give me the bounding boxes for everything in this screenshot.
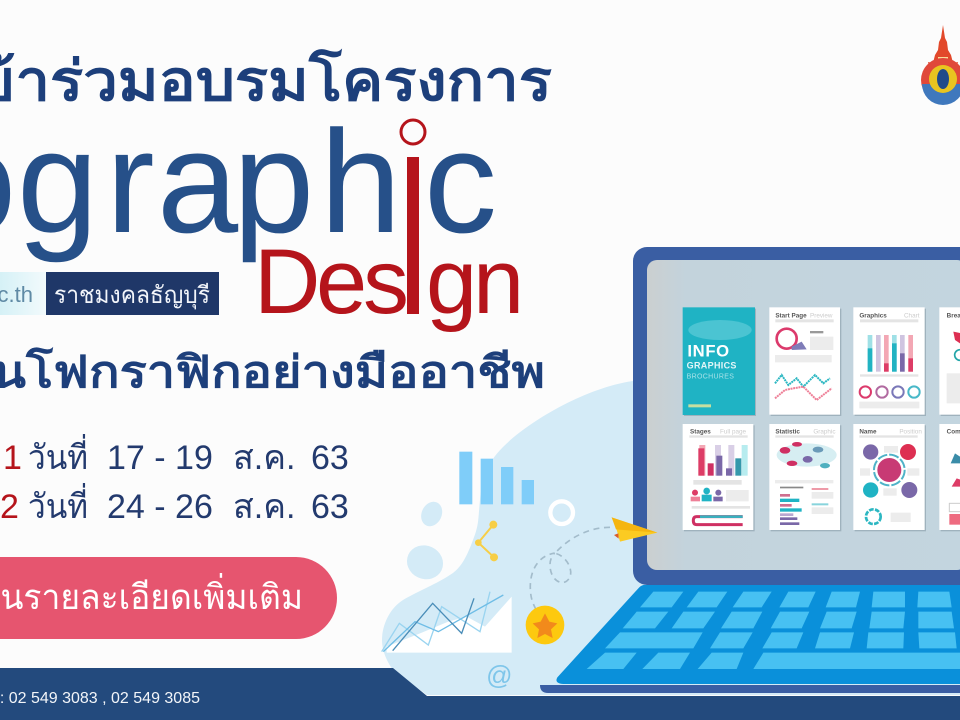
page: fourth bottom [939,424,960,531]
background blob [382,380,960,695]
page: statistic: Statistic [775,429,800,436]
page: cover: BROCHURES [687,373,734,380]
laptop [540,247,960,693]
bar chart icon [459,452,534,504]
word: Design: Desgn [254,231,524,333]
page: cover [683,307,756,416]
laptop base [540,685,960,693]
university name tag [46,272,219,315]
round 2: 63 [311,488,349,526]
illustration: left decorative icons [382,452,610,690]
wordmark: Infographic Design [0,100,524,333]
dashed flight path [530,527,610,620]
schedule [0,434,349,526]
brochure pages [683,307,960,531]
page: name: Position [899,429,922,436]
round 1: ส.ค. [233,439,295,477]
round 1: 1 [3,439,22,477]
page: stages [683,424,755,531]
laptop screen [647,260,960,570]
footer bar [0,668,960,720]
round 2: วันที่ [28,483,88,526]
page: name [853,424,926,531]
page: graphics [853,307,926,416]
page: statistic: Graphic [813,429,836,436]
round 2 [0,483,349,526]
page: start page: Preview [810,313,833,320]
paper plane [612,517,657,542]
page: fourth top [939,307,960,416]
button: more details [0,557,337,639]
page: stages: Full page [720,429,747,436]
logo [921,25,960,105]
page: name: Name [859,429,877,436]
page: start page [769,307,841,416]
page: graphics: Chart [904,313,920,320]
university name tag: ราชมงคลธัญบุรี [54,282,210,310]
red i [401,120,425,314]
laptop keyboard [556,585,960,684]
url tag [0,272,219,315]
page: stages: Stages [690,429,711,436]
round 1 [3,434,349,477]
round 2: 2 [0,488,19,526]
page: cover: GRAPHICS [687,361,737,371]
laptop screen frame [633,247,960,585]
round 1: 63 [311,439,349,477]
line chart [382,592,512,653]
round 2: ส.ค. [233,488,295,526]
share icon [476,522,497,560]
page: cover: INFO [687,342,730,361]
star coin [526,606,564,644]
round 1: 17 - 19 [107,439,213,477]
ring [550,501,573,524]
round 1: วันที่ [28,434,88,477]
page: graphics: Graphics [859,313,887,320]
round 2: 24 - 26 [107,488,213,526]
at sign icon: @ [486,660,513,690]
blobs [401,498,449,585]
page: start page: Start Page [775,313,807,320]
page: statistic [769,424,841,531]
